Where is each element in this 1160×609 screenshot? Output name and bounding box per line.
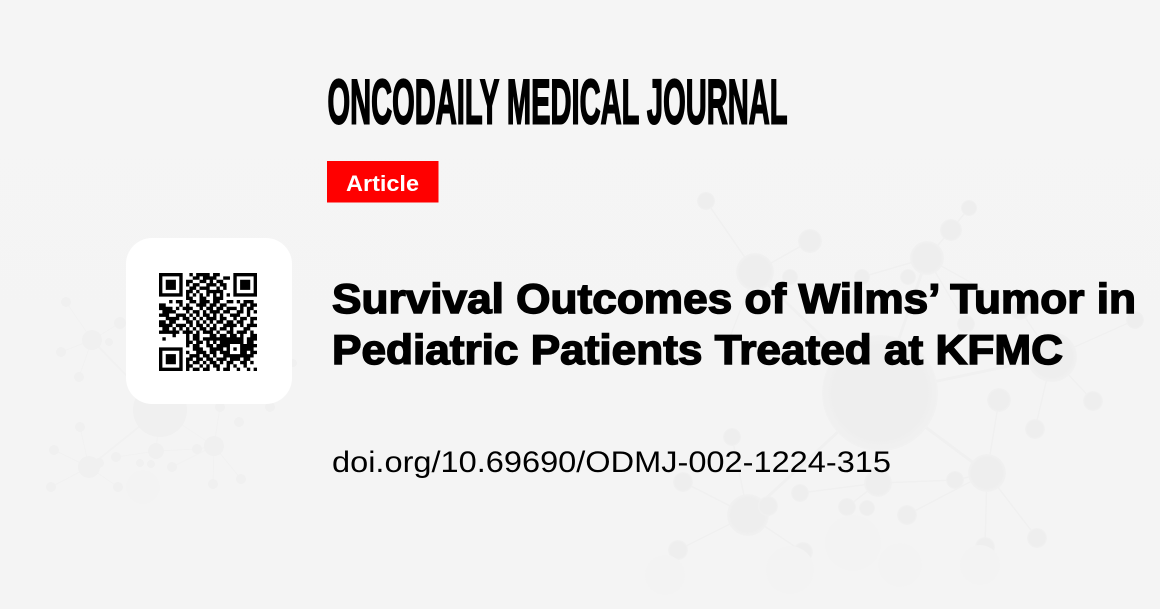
article badge <box>327 161 438 202</box>
article title: Survival Outcomes of Wilms’ Tumor in <box>332 275 1136 322</box>
article badge: Article <box>346 171 419 196</box>
article title: Pediatric Patients Treated at KFMC <box>332 326 1063 373</box>
QR code card <box>126 238 292 404</box>
molecule illustration: left <box>46 297 297 504</box>
article title <box>332 275 1136 373</box>
QR code <box>159 273 257 371</box>
molecule illustration: right <box>645 192 1144 595</box>
DOI: doi.org/10.69690/ODMJ-002-1224-315 <box>332 446 891 479</box>
